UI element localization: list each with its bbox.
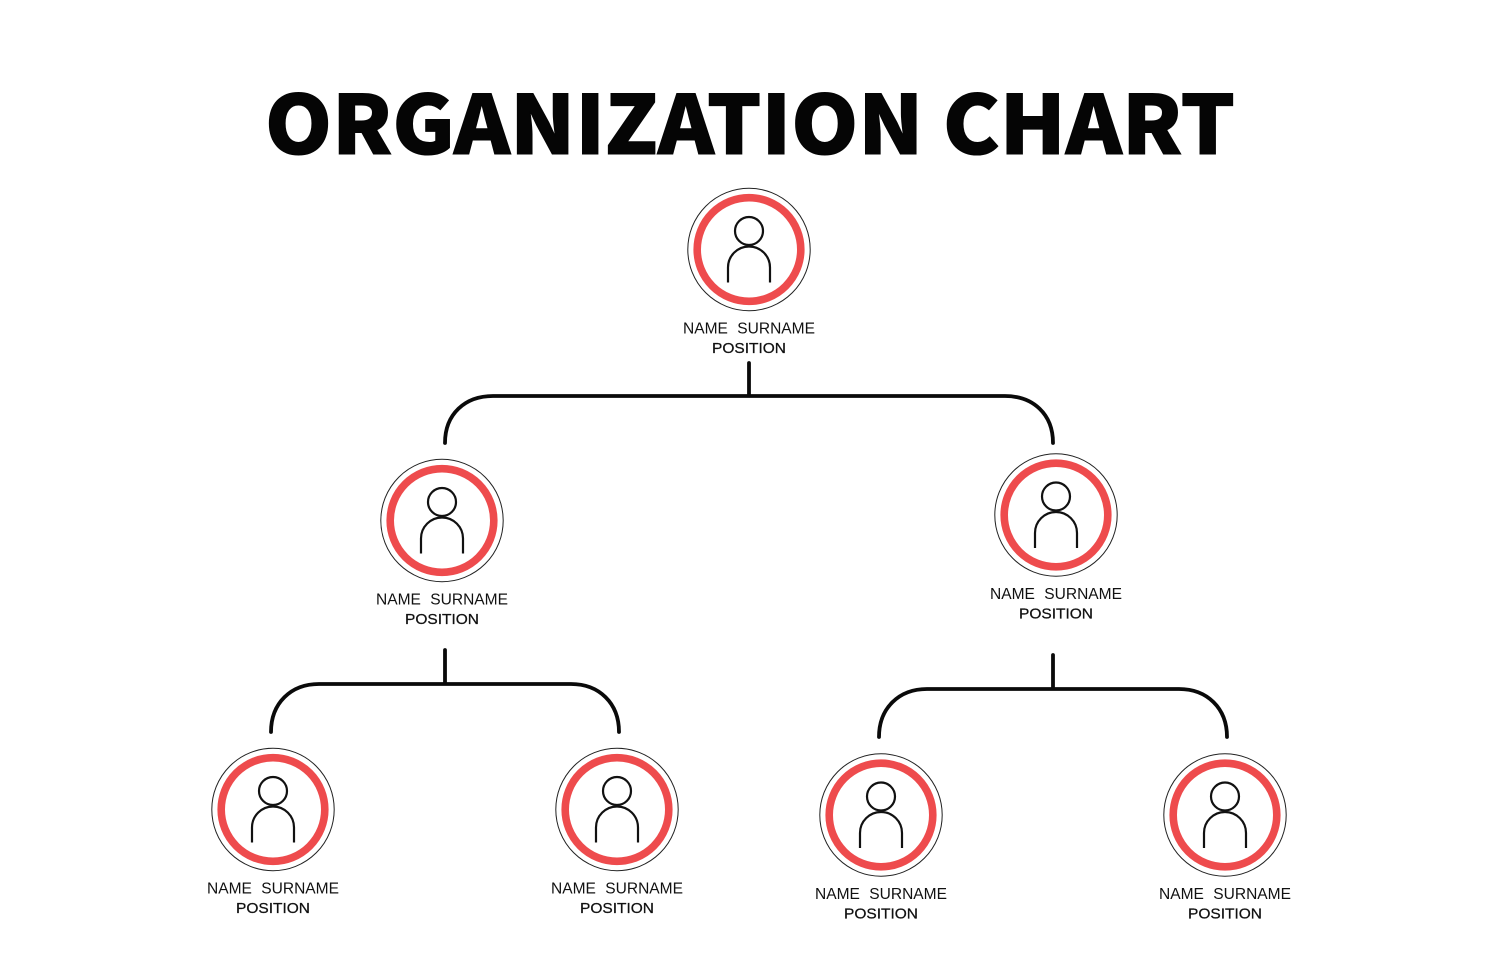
node: third level, second: NAME SURNAME <box>551 880 683 898</box>
node: second level right: POSITION <box>1019 606 1093 622</box>
node: top executive: NAME SURNAME <box>683 320 815 338</box>
connector: left branch <box>271 650 619 732</box>
node: third level, fourth <box>1159 754 1291 922</box>
node: second level left: NAME SURNAME <box>376 592 508 608</box>
node: third level, first: POSITION <box>236 901 310 917</box>
node: third level, second: POSITION <box>580 901 654 917</box>
node: third level, third: POSITION <box>844 906 918 922</box>
node: top executive <box>683 188 815 357</box>
node: second level right: NAME SURNAME <box>990 586 1122 603</box>
connector: right branch <box>879 655 1227 737</box>
connector: top level to second level <box>445 363 1053 443</box>
node: third level, fourth: POSITION <box>1188 906 1262 922</box>
node: third level, third <box>815 754 947 922</box>
node: third level, first <box>207 748 339 917</box>
node: second level right <box>990 454 1122 622</box>
node: third level, second <box>551 748 683 917</box>
node: third level, first: NAME SURNAME <box>207 880 339 898</box>
node: second level left <box>376 459 508 628</box>
node: third level, fourth: NAME SURNAME <box>1159 886 1291 903</box>
node: third level, third: NAME SURNAME <box>815 886 947 903</box>
title: ORGANIZATION CHART <box>265 61 1235 178</box>
node: top executive: POSITION <box>712 341 786 357</box>
node: second level left: POSITION <box>405 612 479 628</box>
